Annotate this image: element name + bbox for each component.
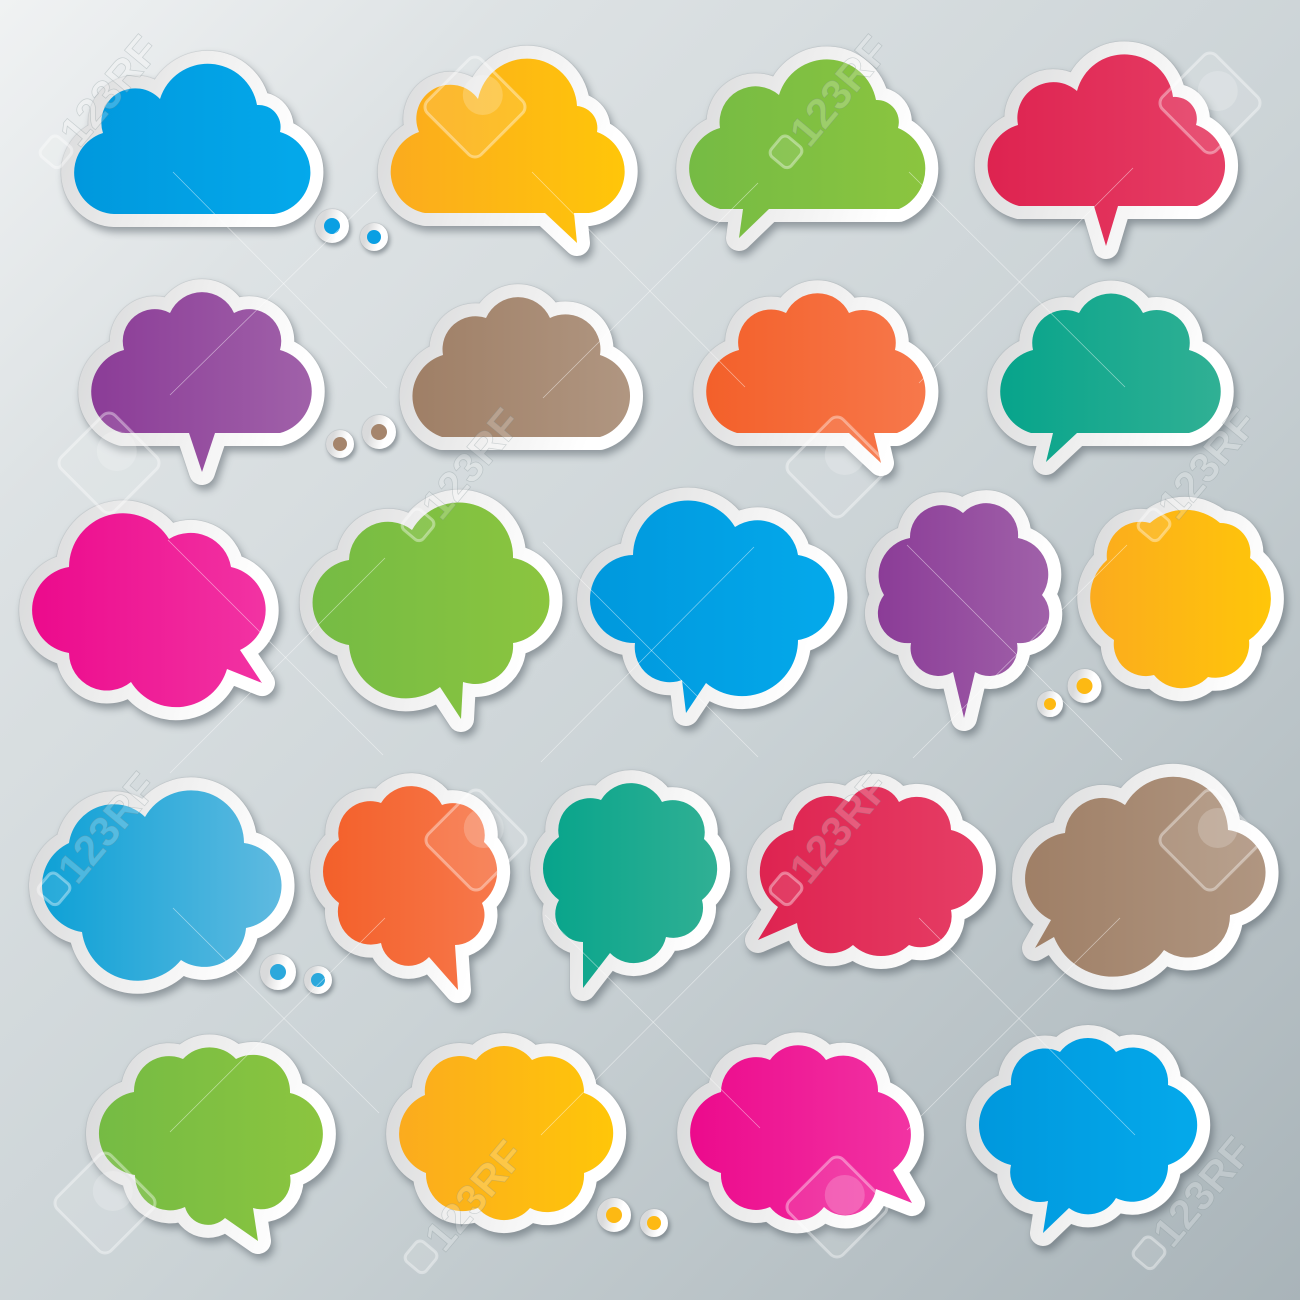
bubble: blue scallop — [979, 1038, 1197, 1233]
row 4 bubbles — [42, 777, 1266, 990]
bubble: yellow scallop thought — [399, 1046, 613, 1220]
bubble: green — [689, 59, 925, 238]
row 5 bubbles — [99, 1038, 1197, 1241]
thought dots: blue — [324, 218, 381, 244]
bubble: brown cloud — [1025, 777, 1266, 977]
bubble: yellow flower thought — [1090, 510, 1271, 688]
bubble: purple flower — [878, 503, 1049, 718]
bubble: orange — [706, 293, 925, 463]
thought dots: brown — [333, 424, 387, 451]
bubble: yellow — [391, 59, 625, 243]
bubble: red — [988, 54, 1225, 246]
watermark: 123RF logos: 123RF — [780, 27, 898, 155]
bubble: teal — [1000, 293, 1221, 462]
row 3 bubbles — [32, 501, 1271, 719]
bubble: green scallop — [99, 1047, 323, 1241]
watermark: 123RF logos: 123RF — [50, 27, 168, 155]
bubble: purple — [91, 292, 312, 472]
bubble: blue thought cloud — [74, 64, 310, 214]
watermark: 123RF logos: 123RF — [1148, 400, 1266, 528]
bubble: red cloud — [758, 787, 983, 956]
watermark: 123RF logos: 123RF — [415, 1132, 533, 1260]
watermark: 123RF logos: 123RF — [780, 764, 898, 892]
watermark: 123RF logos: 123RF — [1143, 1128, 1261, 1256]
thought dots: sky blue — [270, 964, 325, 987]
row 2 bubbles — [91, 292, 1221, 472]
bubble: blue cloud — [590, 501, 834, 713]
bubble: sky blue thought — [42, 790, 282, 981]
bubble: magenta scallop — [690, 1045, 912, 1220]
row 1 bubbles — [74, 54, 1225, 246]
bubble: orange flower — [323, 786, 497, 990]
bubble: green cloud — [313, 503, 549, 719]
thought dots: yellow — [1044, 678, 1092, 710]
watermark: 123RF logos: 123RF — [48, 764, 166, 892]
bubble: magenta — [32, 513, 266, 707]
bubble: brown thought cloud — [412, 297, 630, 437]
bubble: teal flower — [543, 783, 717, 988]
watermark: 123RF logos: 123RF — [412, 400, 530, 528]
thought dots: yellow lower — [606, 1207, 661, 1230]
